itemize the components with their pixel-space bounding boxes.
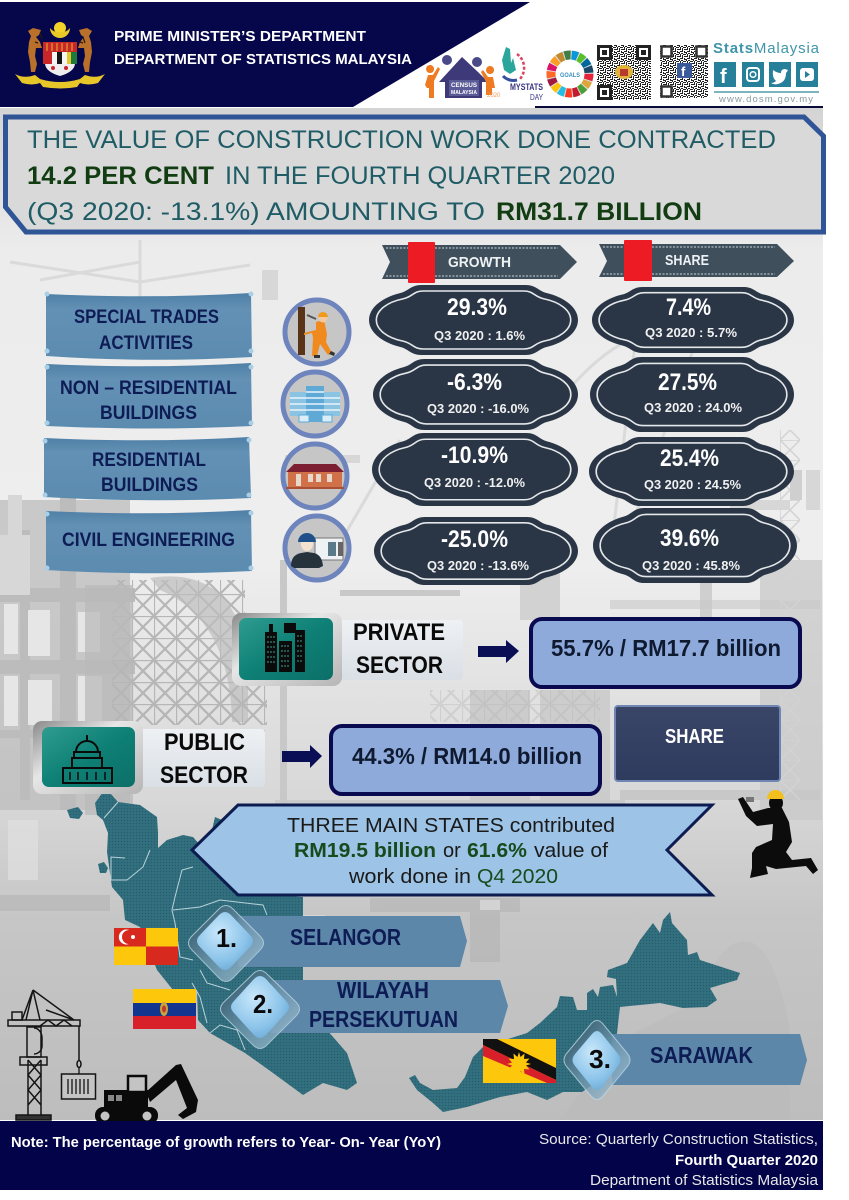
QR code: facebook: f bbox=[681, 64, 686, 79]
column header: growth: GROWTH bbox=[448, 254, 511, 271]
sign: share: SHARE bbox=[665, 726, 724, 748]
title panel: THE VALUE OF CONSTRUCTION WORK DONE CONTRACTED bbox=[27, 126, 776, 154]
logo: SDG wheel: GOALS bbox=[560, 73, 580, 79]
source credit: Department of Statistics Malaysia bbox=[590, 1172, 819, 1189]
callout: three main states: 61.6% bbox=[467, 840, 527, 862]
logo: MyStats Day: DAY bbox=[530, 93, 544, 102]
sector: private bbox=[232, 613, 463, 686]
icon: kneeling worker silhouette bbox=[738, 790, 818, 878]
header logos bbox=[425, 40, 820, 105]
plaque: non-residential growth: Q3 2020 : -16.0% bbox=[427, 401, 529, 416]
source credit: Fourth Quarter 2020 bbox=[675, 1152, 818, 1169]
state rank 1: Selangor bbox=[114, 906, 467, 982]
sign: share bbox=[615, 706, 780, 781]
callout: three main states: Q4 2020 bbox=[477, 866, 558, 888]
panel: residential buildings: RESIDENTIAL bbox=[92, 450, 206, 471]
plaque: residential share bbox=[589, 437, 794, 506]
panel: special trades activities: ACTIVITIES bbox=[99, 333, 193, 354]
panel: non-residential buildings: NON – RESIDENTIAL bbox=[60, 378, 237, 399]
plaque: special trades share: Q3 2020 : 5.7% bbox=[645, 325, 737, 340]
arrow: private sector to value bbox=[478, 640, 519, 663]
map: peninsular and east Malaysia bbox=[67, 792, 740, 1112]
header band bbox=[0, 2, 823, 108]
source credit: Source: Quarterly Construction Statistics, bbox=[539, 1131, 818, 1148]
panel: non-residential buildings bbox=[44, 363, 254, 428]
sector: public bbox=[33, 721, 265, 794]
value box: public sector: 44.3% / RM14.0 billion bbox=[352, 743, 582, 769]
column header: growth bbox=[382, 242, 577, 283]
icon: construction worker bbox=[285, 300, 349, 364]
panel: special trades activities bbox=[44, 292, 254, 360]
icon: tower crane with container bbox=[8, 990, 96, 1120]
plaque: civil engineering growth: -25.0% bbox=[441, 526, 508, 553]
state rank 3: Sarawak: 3. bbox=[589, 1044, 611, 1074]
state rank 1: Selangor: 1. bbox=[216, 923, 237, 953]
flag: Selangor bbox=[114, 928, 178, 965]
footnote: Note: The percentage of growth refers to Year- On- Year (YoY) bbox=[11, 1134, 441, 1151]
panel: non-residential buildings: BUILDINGS bbox=[100, 403, 197, 424]
panel: residential buildings bbox=[42, 437, 252, 500]
plaque: special trades growth: Q3 2020 : 1.6% bbox=[434, 328, 525, 343]
icon: Malaysian coat of arms bbox=[15, 22, 105, 88]
icon: civil engineer bbox=[285, 516, 349, 580]
plaque: residential growth bbox=[372, 433, 578, 506]
source credit bbox=[539, 1131, 819, 1189]
icon: excavator bbox=[95, 1064, 198, 1124]
state rank 1: Selangor: SELANGOR bbox=[290, 924, 401, 950]
logo: census 2020: CENSUS bbox=[451, 82, 478, 89]
plaque: non-residential growth: -6.3% bbox=[447, 369, 502, 396]
plaque: civil engineering growth: Q3 2020 : -13.6% bbox=[427, 558, 529, 573]
panel: special trades activities: SPECIAL TRADES bbox=[74, 307, 219, 328]
plaque: non-residential share: 27.5% bbox=[658, 369, 717, 396]
state rank 2: Wilayah Persekutuan: 2. bbox=[253, 989, 273, 1019]
logo: SDG wheel bbox=[551, 55, 589, 93]
logo: census 2020: 2020 bbox=[487, 93, 501, 99]
callout: three main states: RM19.5 billion bbox=[294, 840, 436, 862]
plaque: special trades growth: 29.3% bbox=[447, 294, 507, 321]
department name: DEPARTMENT OF STATISTICS MALAYSIA bbox=[114, 51, 412, 68]
state rank 3: Sarawak: SARAWAK bbox=[650, 1042, 753, 1068]
flag: Federal Territory bbox=[133, 989, 196, 1029]
icon: city buildings bbox=[265, 623, 305, 672]
title panel: 14.2 PER CENT bbox=[27, 162, 214, 190]
plaque: civil engineering share bbox=[593, 508, 797, 583]
sector: public: PUBLIC bbox=[164, 729, 245, 756]
plaque: special trades share: 7.4% bbox=[666, 294, 711, 321]
sector: public: SECTOR bbox=[160, 762, 248, 789]
StatsMalaysia social block: StatsMalaysia bbox=[713, 40, 820, 57]
plaque: non-residential share bbox=[590, 357, 794, 432]
logo: MyStats Day bbox=[502, 47, 544, 102]
StatsMalaysia social block bbox=[713, 40, 820, 105]
state rank 3: Sarawak bbox=[483, 1020, 807, 1100]
callout: three main states: THREE MAIN STATES contributed bbox=[287, 815, 615, 837]
plaque: residential growth: -10.9% bbox=[441, 442, 508, 469]
plaque: civil engineering share: Q3 2020 : 45.8% bbox=[642, 558, 740, 573]
logo: MyStats Day: MYSTATS bbox=[510, 82, 543, 92]
title panel: IN THE FOURTH QUARTER 2020 bbox=[225, 162, 615, 190]
panel: civil engineering: CIVIL ENGINEERING bbox=[62, 530, 235, 551]
icon: office buildings bbox=[283, 372, 347, 436]
department name bbox=[114, 28, 412, 68]
QR code: website bbox=[597, 45, 651, 100]
QR code: facebook bbox=[660, 45, 708, 98]
panel: civil engineering bbox=[44, 510, 254, 573]
logo: census 2020 bbox=[425, 55, 501, 99]
sector: private: PRIVATE bbox=[353, 619, 445, 646]
title panel: (Q3 2020: -13.1%) AMOUNTING TO bbox=[27, 198, 485, 226]
icon: capitol building bbox=[63, 735, 112, 783]
plaque: residential growth: Q3 2020 : -12.0% bbox=[424, 475, 525, 490]
callout: three main states bbox=[192, 805, 712, 895]
callout: three main states: value of bbox=[534, 840, 608, 862]
callout: three main states: or bbox=[443, 840, 461, 862]
column header: share bbox=[599, 240, 794, 281]
state rank 2: Wilayah Persekutuan: PERSEKUTUAN bbox=[309, 1006, 458, 1032]
title panel bbox=[6, 117, 824, 232]
StatsMalaysia social block: www.dosm.gov.my bbox=[718, 94, 813, 105]
flag: Sarawak bbox=[483, 1039, 556, 1083]
footer band bbox=[0, 1121, 823, 1190]
plaque: residential share: 25.4% bbox=[660, 445, 719, 472]
plaque: non-residential growth bbox=[373, 359, 578, 430]
sector: private: SECTOR bbox=[356, 652, 443, 679]
callout: three main states: work done in bbox=[348, 866, 471, 888]
icon: residential house bbox=[283, 444, 347, 508]
value box: private sector bbox=[531, 619, 800, 687]
plaque: non-residential share: Q3 2020 : 24.0% bbox=[644, 400, 742, 415]
logo: census 2020: MALAYSIA bbox=[451, 90, 477, 96]
department name: PRIME MINISTER’S DEPARTMENT bbox=[114, 28, 366, 45]
plaque: special trades share bbox=[592, 287, 794, 353]
StatsMalaysia social block: f bbox=[720, 66, 727, 88]
value box: private sector: 55.7% / RM17.7 billion bbox=[551, 635, 781, 661]
value box: public sector bbox=[331, 726, 600, 794]
state rank 2: Wilayah Persekutuan bbox=[133, 970, 508, 1048]
state rank 2: Wilayah Persekutuan: WILAYAH bbox=[337, 977, 429, 1003]
plaque: special trades growth bbox=[369, 285, 578, 355]
title panel: RM31.7 BILLION bbox=[496, 198, 702, 226]
plaque: civil engineering growth bbox=[374, 517, 578, 585]
column header: share: SHARE bbox=[665, 252, 709, 269]
plaque: residential share: Q3 2020 : 24.5% bbox=[644, 477, 741, 492]
plaque: civil engineering share: 39.6% bbox=[660, 525, 719, 552]
arrow: public sector to value bbox=[282, 745, 322, 768]
panel: residential buildings: BUILDINGS bbox=[101, 475, 198, 496]
